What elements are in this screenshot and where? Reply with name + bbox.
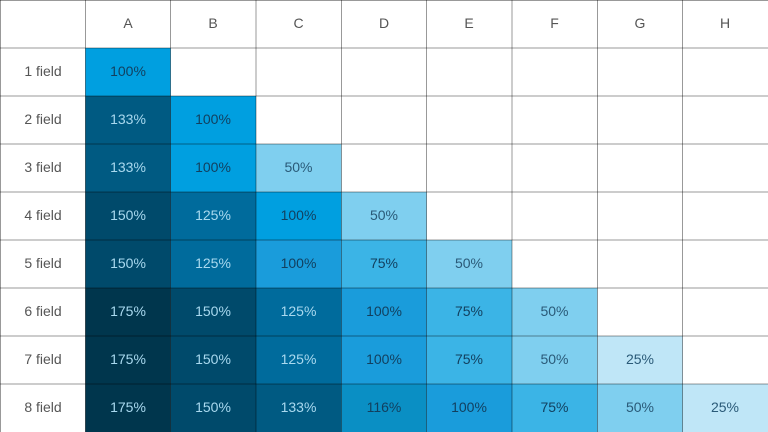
- cell 8A: 175%: [110, 399, 146, 415]
- cell 1A: 100%: [110, 63, 146, 79]
- cell 6F: 50%: [540, 303, 569, 319]
- cell 6C: [256, 288, 341, 336]
- cell 8A: [85, 384, 171, 432]
- row label 1: 1 field: [24, 63, 62, 79]
- cell 2B: 100%: [195, 111, 231, 127]
- row 8 cells: [85, 384, 768, 432]
- cell 7B: [171, 336, 256, 384]
- cell 8C: [256, 384, 341, 432]
- cell 3B: 100%: [195, 159, 231, 175]
- cell 3C: [256, 144, 341, 192]
- row label 4: 4 field: [24, 207, 62, 223]
- cell 3C: 50%: [284, 159, 313, 175]
- cell 8G: 50%: [626, 399, 654, 415]
- cell 6E: 75%: [455, 303, 483, 319]
- row labels: [24, 63, 62, 415]
- cell 8H: 25%: [711, 399, 739, 415]
- cell 8F: [512, 384, 597, 432]
- cell 8B: [171, 384, 256, 432]
- cell 7E: [427, 336, 512, 384]
- cell 5C: 100%: [281, 255, 316, 271]
- cell 7F: 50%: [540, 351, 569, 367]
- cell 4B: [171, 192, 256, 240]
- row 2 cells: [85, 96, 256, 144]
- cell 3B: [171, 144, 256, 192]
- cell 5B: 125%: [195, 255, 231, 271]
- cell 7G: 25%: [626, 351, 654, 367]
- header E: E: [464, 15, 474, 31]
- cell 5E: 50%: [455, 255, 483, 271]
- cell 7C: [256, 336, 341, 384]
- cell 8C: 133%: [281, 399, 316, 415]
- row label 3: 3 field: [24, 159, 62, 175]
- row 5 cells: [85, 240, 512, 288]
- header D: D: [379, 15, 389, 31]
- cell 4A: 150%: [110, 207, 146, 223]
- cell 8E: 100%: [451, 399, 487, 415]
- cell 6D: [341, 288, 427, 336]
- row 7 cells: [85, 336, 683, 384]
- cell 6B: 150%: [195, 303, 231, 319]
- row label 8: 8 field: [24, 399, 62, 415]
- cell 6C: 125%: [281, 303, 316, 319]
- cell 3A: [85, 144, 171, 192]
- cell 5D: [341, 240, 427, 288]
- cell 8E: [427, 384, 512, 432]
- row label 7: 7 field: [24, 351, 62, 367]
- cell 2B: [171, 96, 256, 144]
- header F: F: [550, 15, 559, 31]
- cell 6F: [512, 288, 597, 336]
- cell 4D: 50%: [370, 207, 398, 223]
- cell 5A: [85, 240, 171, 288]
- cell 7C: 125%: [281, 351, 316, 367]
- cell 5D: 75%: [370, 255, 398, 271]
- column headers: [123, 15, 730, 31]
- cell 7B: 150%: [195, 351, 231, 367]
- row 3 cells: [85, 144, 341, 192]
- cell 6A: 175%: [110, 303, 146, 319]
- cell 7A: [85, 336, 171, 384]
- row label 5: 5 field: [24, 255, 62, 271]
- cell 4C: [256, 192, 341, 240]
- cell 7A: 175%: [110, 351, 146, 367]
- cell 4C: 100%: [281, 207, 316, 223]
- cell 7G: [597, 336, 683, 384]
- cell 8H: [683, 384, 768, 432]
- row 6 cells: [85, 288, 597, 336]
- cell 7D: [341, 336, 427, 384]
- cell 8D: 116%: [367, 399, 401, 415]
- header G: G: [635, 15, 645, 31]
- cell 7E: 75%: [455, 351, 483, 367]
- header A: A: [123, 15, 133, 31]
- cell 8F: 75%: [540, 399, 569, 415]
- cell 7F: [512, 336, 597, 384]
- cell 8B: 150%: [195, 399, 231, 415]
- cell 5B: [171, 240, 256, 288]
- cell 4D: [341, 192, 427, 240]
- cell 2A: [85, 96, 171, 144]
- row label 2: 2 field: [24, 111, 62, 127]
- cell 8D: [341, 384, 427, 432]
- cell 4A: [85, 192, 171, 240]
- cell 6A: [85, 288, 171, 336]
- header C: C: [293, 15, 304, 31]
- cell 6B: [171, 288, 256, 336]
- row 1 cells: [85, 48, 171, 96]
- cell 7D: 100%: [366, 351, 402, 367]
- cell 6D: 100%: [366, 303, 402, 319]
- cell 4B: 125%: [195, 207, 231, 223]
- cell 5C: [256, 240, 341, 288]
- cell 6E: [427, 288, 512, 336]
- cell 8G: [597, 384, 683, 432]
- row label 6: 6 field: [24, 303, 62, 319]
- cell 3A: 133%: [110, 159, 146, 175]
- cell 5E: [427, 240, 512, 288]
- header H: H: [720, 15, 730, 31]
- row 4 cells: [85, 192, 427, 240]
- cell 5A: 150%: [110, 255, 146, 271]
- header B: B: [208, 15, 218, 31]
- cell 2A: 133%: [110, 111, 146, 127]
